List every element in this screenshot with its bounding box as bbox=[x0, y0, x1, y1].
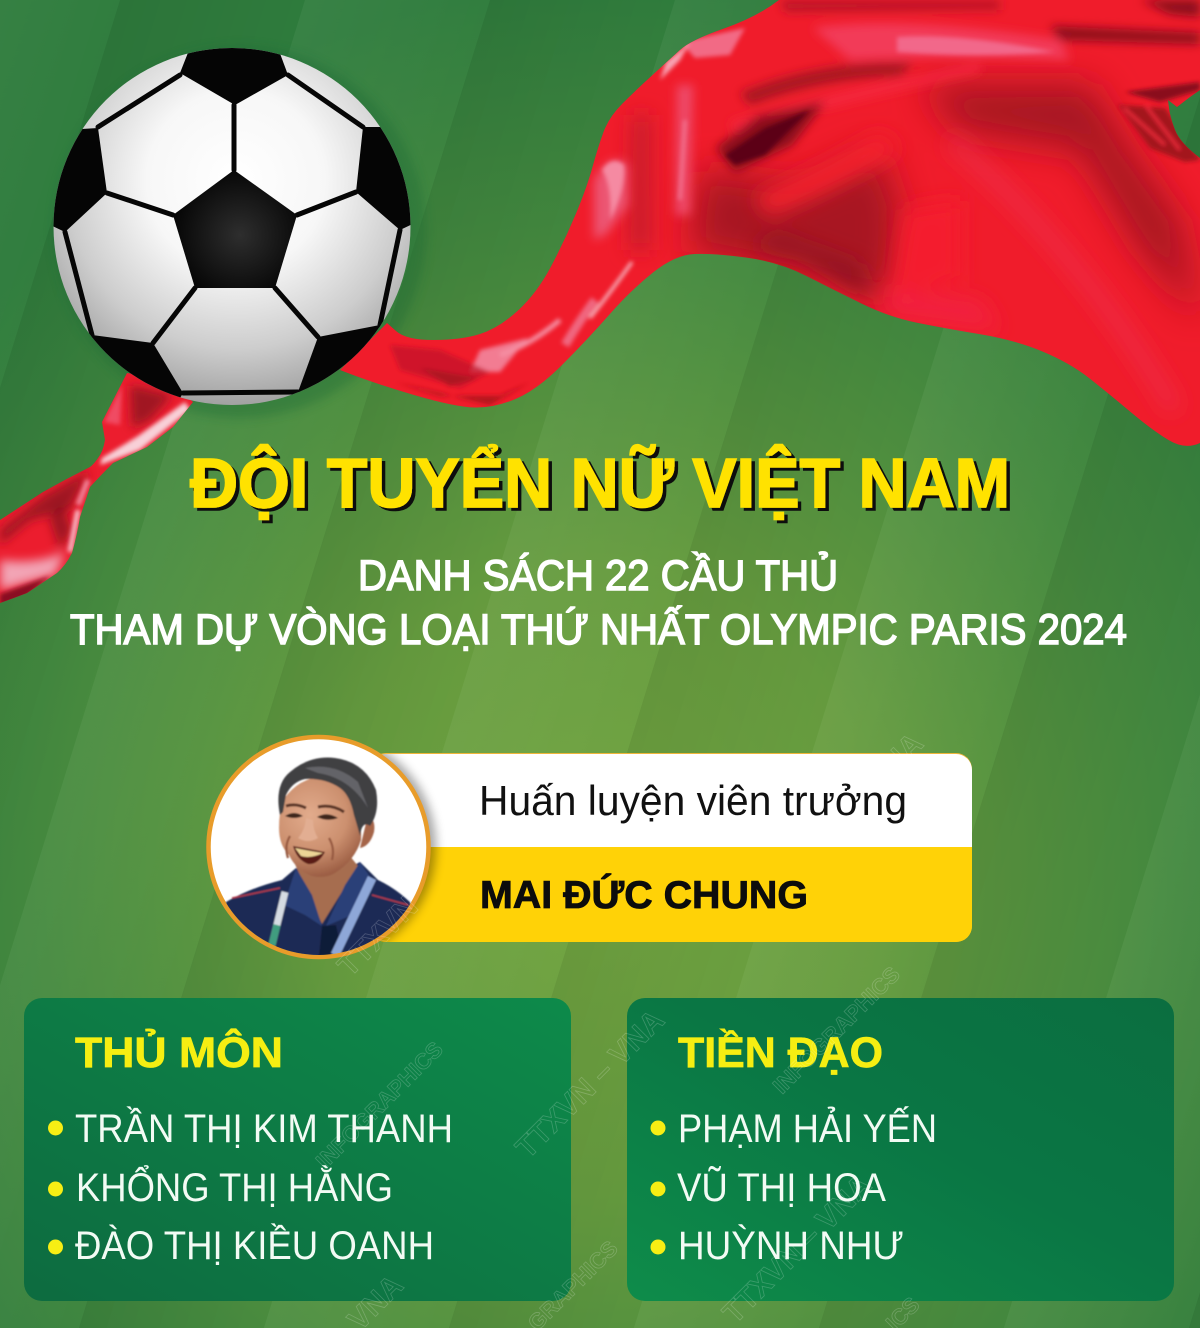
subtitle bbox=[70, 551, 1127, 654]
red silk flag tail bbox=[0, 373, 193, 606]
coach portrait bbox=[208, 737, 428, 965]
forward list: HUỲNH NHƯ bbox=[678, 1223, 904, 1268]
soccer ball bbox=[54, 48, 410, 405]
goalkeeper list bbox=[48, 1105, 453, 1268]
panel: forwards bbox=[627, 998, 1174, 1301]
subtitle: THAM DỰ VÒNG LOẠI THỨ NHẤT OLYMPIC PARIS 2024 bbox=[70, 606, 1127, 654]
forward list: VŨ THỊ HOA bbox=[677, 1165, 886, 1210]
heading: goalkeepers: THỦ MÔN bbox=[75, 1028, 283, 1077]
forward list: PHẠM HẢI YẾN bbox=[678, 1105, 937, 1151]
subtitle: DANH SÁCH 22 CẦU THỦ bbox=[358, 551, 838, 600]
goalkeeper list: TRẦN THỊ KIM THANH bbox=[75, 1105, 453, 1151]
forward list bbox=[650, 1105, 937, 1268]
watermarks: TTXVN – VNA bbox=[510, 1004, 671, 1165]
watermarks: TTXVN bbox=[332, 890, 424, 983]
goalkeeper list: KHỔNG THỊ HẰNG bbox=[76, 1163, 393, 1210]
watermarks bbox=[311, 727, 930, 1328]
watermarks: INFOGRAPHICS bbox=[768, 962, 905, 1099]
coach card bbox=[380, 753, 972, 942]
watermarks: VNA bbox=[862, 727, 930, 795]
coach role: Huấn luyện viên trưởng bbox=[479, 777, 907, 824]
goalkeeper list: ĐÀO THỊ KIỀU OANH bbox=[75, 1222, 434, 1268]
watermarks: INFOGRAPHICS bbox=[311, 1037, 448, 1174]
heading: forwards: TIỀN ĐẠO bbox=[678, 1029, 883, 1077]
red silk flag bbox=[340, 0, 1200, 446]
title: ĐỘI TUYỂN NỮ VIỆT NAM bbox=[190, 443, 1010, 522]
watermarks: TTXVN – VNA bbox=[717, 1169, 878, 1328]
panel: goalkeepers bbox=[24, 998, 571, 1301]
coach name: MAI ĐỨC CHUNG bbox=[480, 873, 808, 917]
large soft dark folds bbox=[690, 85, 1200, 320]
